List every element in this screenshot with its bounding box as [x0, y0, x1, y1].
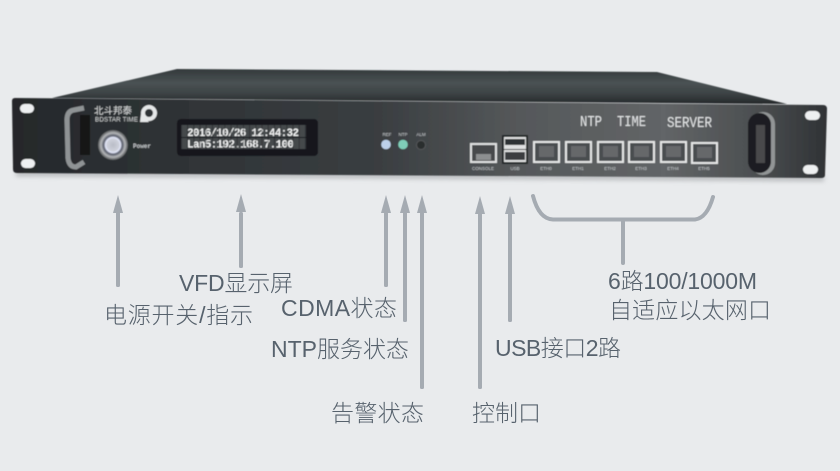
- VFD display: 2016/10/26 12:44:32: [187, 128, 299, 140]
- VFD display: Lan5:192.168.7.100: [187, 140, 294, 152]
- arrow: alarm: [417, 195, 427, 389]
- ethernet port ETH2: [597, 141, 624, 171]
- label: VFD display: VFD显示屏: [179, 270, 293, 296]
- console port: [470, 143, 497, 171]
- USB ports: [502, 135, 528, 171]
- arrow: console: [475, 196, 485, 389]
- label: ethernet ports: 自适应以太网口: [609, 297, 771, 323]
- ethernet port ETH3: ETH3: [635, 166, 647, 171]
- title: NTP TIME SERVER: SERVER: [667, 116, 712, 132]
- device: rack time server: [12, 69, 827, 178]
- label: USB ports: USB接口2路: [495, 335, 621, 361]
- label: NTP service status: NTP服务状态: [271, 336, 409, 362]
- left handle: [67, 108, 90, 167]
- title: NTP TIME SERVER: NTP: [580, 115, 602, 131]
- ethernet port ETH0: [533, 141, 560, 171]
- arrow: CDMA: [381, 195, 391, 287]
- arrow: USB: [505, 196, 515, 322]
- bracket: ethernet ports: [533, 196, 713, 263]
- title: NTP TIME SERVER: [580, 115, 712, 132]
- brand logo text: [94, 103, 138, 124]
- status LEDs: REF: [382, 132, 392, 137]
- ethernet port ETH4: ETH4: [667, 166, 679, 171]
- brand logo mark: [140, 107, 155, 122]
- device front panel: [12, 98, 827, 178]
- USB ports: USB: [510, 166, 520, 171]
- ethernet port ETH3: [628, 141, 655, 171]
- brand logo text: BDSTAR TIME: [95, 116, 138, 124]
- status LEDs: NTP: [398, 132, 408, 137]
- VFD display: [177, 119, 318, 156]
- panel shadow: [16, 172, 824, 181]
- label: ethernet ports: 6路100/1000M: [608, 268, 757, 294]
- label: power switch: 电源开关/指示: [104, 302, 253, 328]
- device top cover: [52, 69, 787, 104]
- ethernet port ETH1: [565, 141, 592, 171]
- arrow: power: [113, 195, 123, 287]
- brand logo text: 北斗邦泰: [94, 103, 132, 117]
- ethernet port ETH0: ETH0: [540, 166, 552, 171]
- label: ethernet ports: [608, 268, 771, 323]
- label: CDMA status: CDMA状态: [281, 295, 397, 321]
- power button: Power: [133, 143, 151, 150]
- right handle: [748, 112, 775, 175]
- arrow: VFD: [236, 194, 246, 268]
- console port: CONSOLE: [472, 166, 494, 171]
- ethernet port ETH4: [660, 141, 687, 171]
- status LEDs: [381, 132, 426, 150]
- title: NTP TIME SERVER: TIME: [617, 115, 646, 131]
- status LEDs: ALM: [416, 132, 426, 137]
- ethernet port ETH5: [691, 142, 718, 171]
- power button: [98, 130, 151, 160]
- label: alarm status: 告警状态: [331, 400, 424, 426]
- ethernet port ETH5: ETH5: [698, 166, 710, 171]
- arrow: NTP: [400, 195, 410, 322]
- label: console port: 控制口: [472, 400, 541, 426]
- ethernet port ETH1: ETH1: [572, 166, 584, 171]
- ethernet port ETH2: ETH2: [604, 166, 616, 171]
- rack mount holes: [20, 104, 820, 174]
